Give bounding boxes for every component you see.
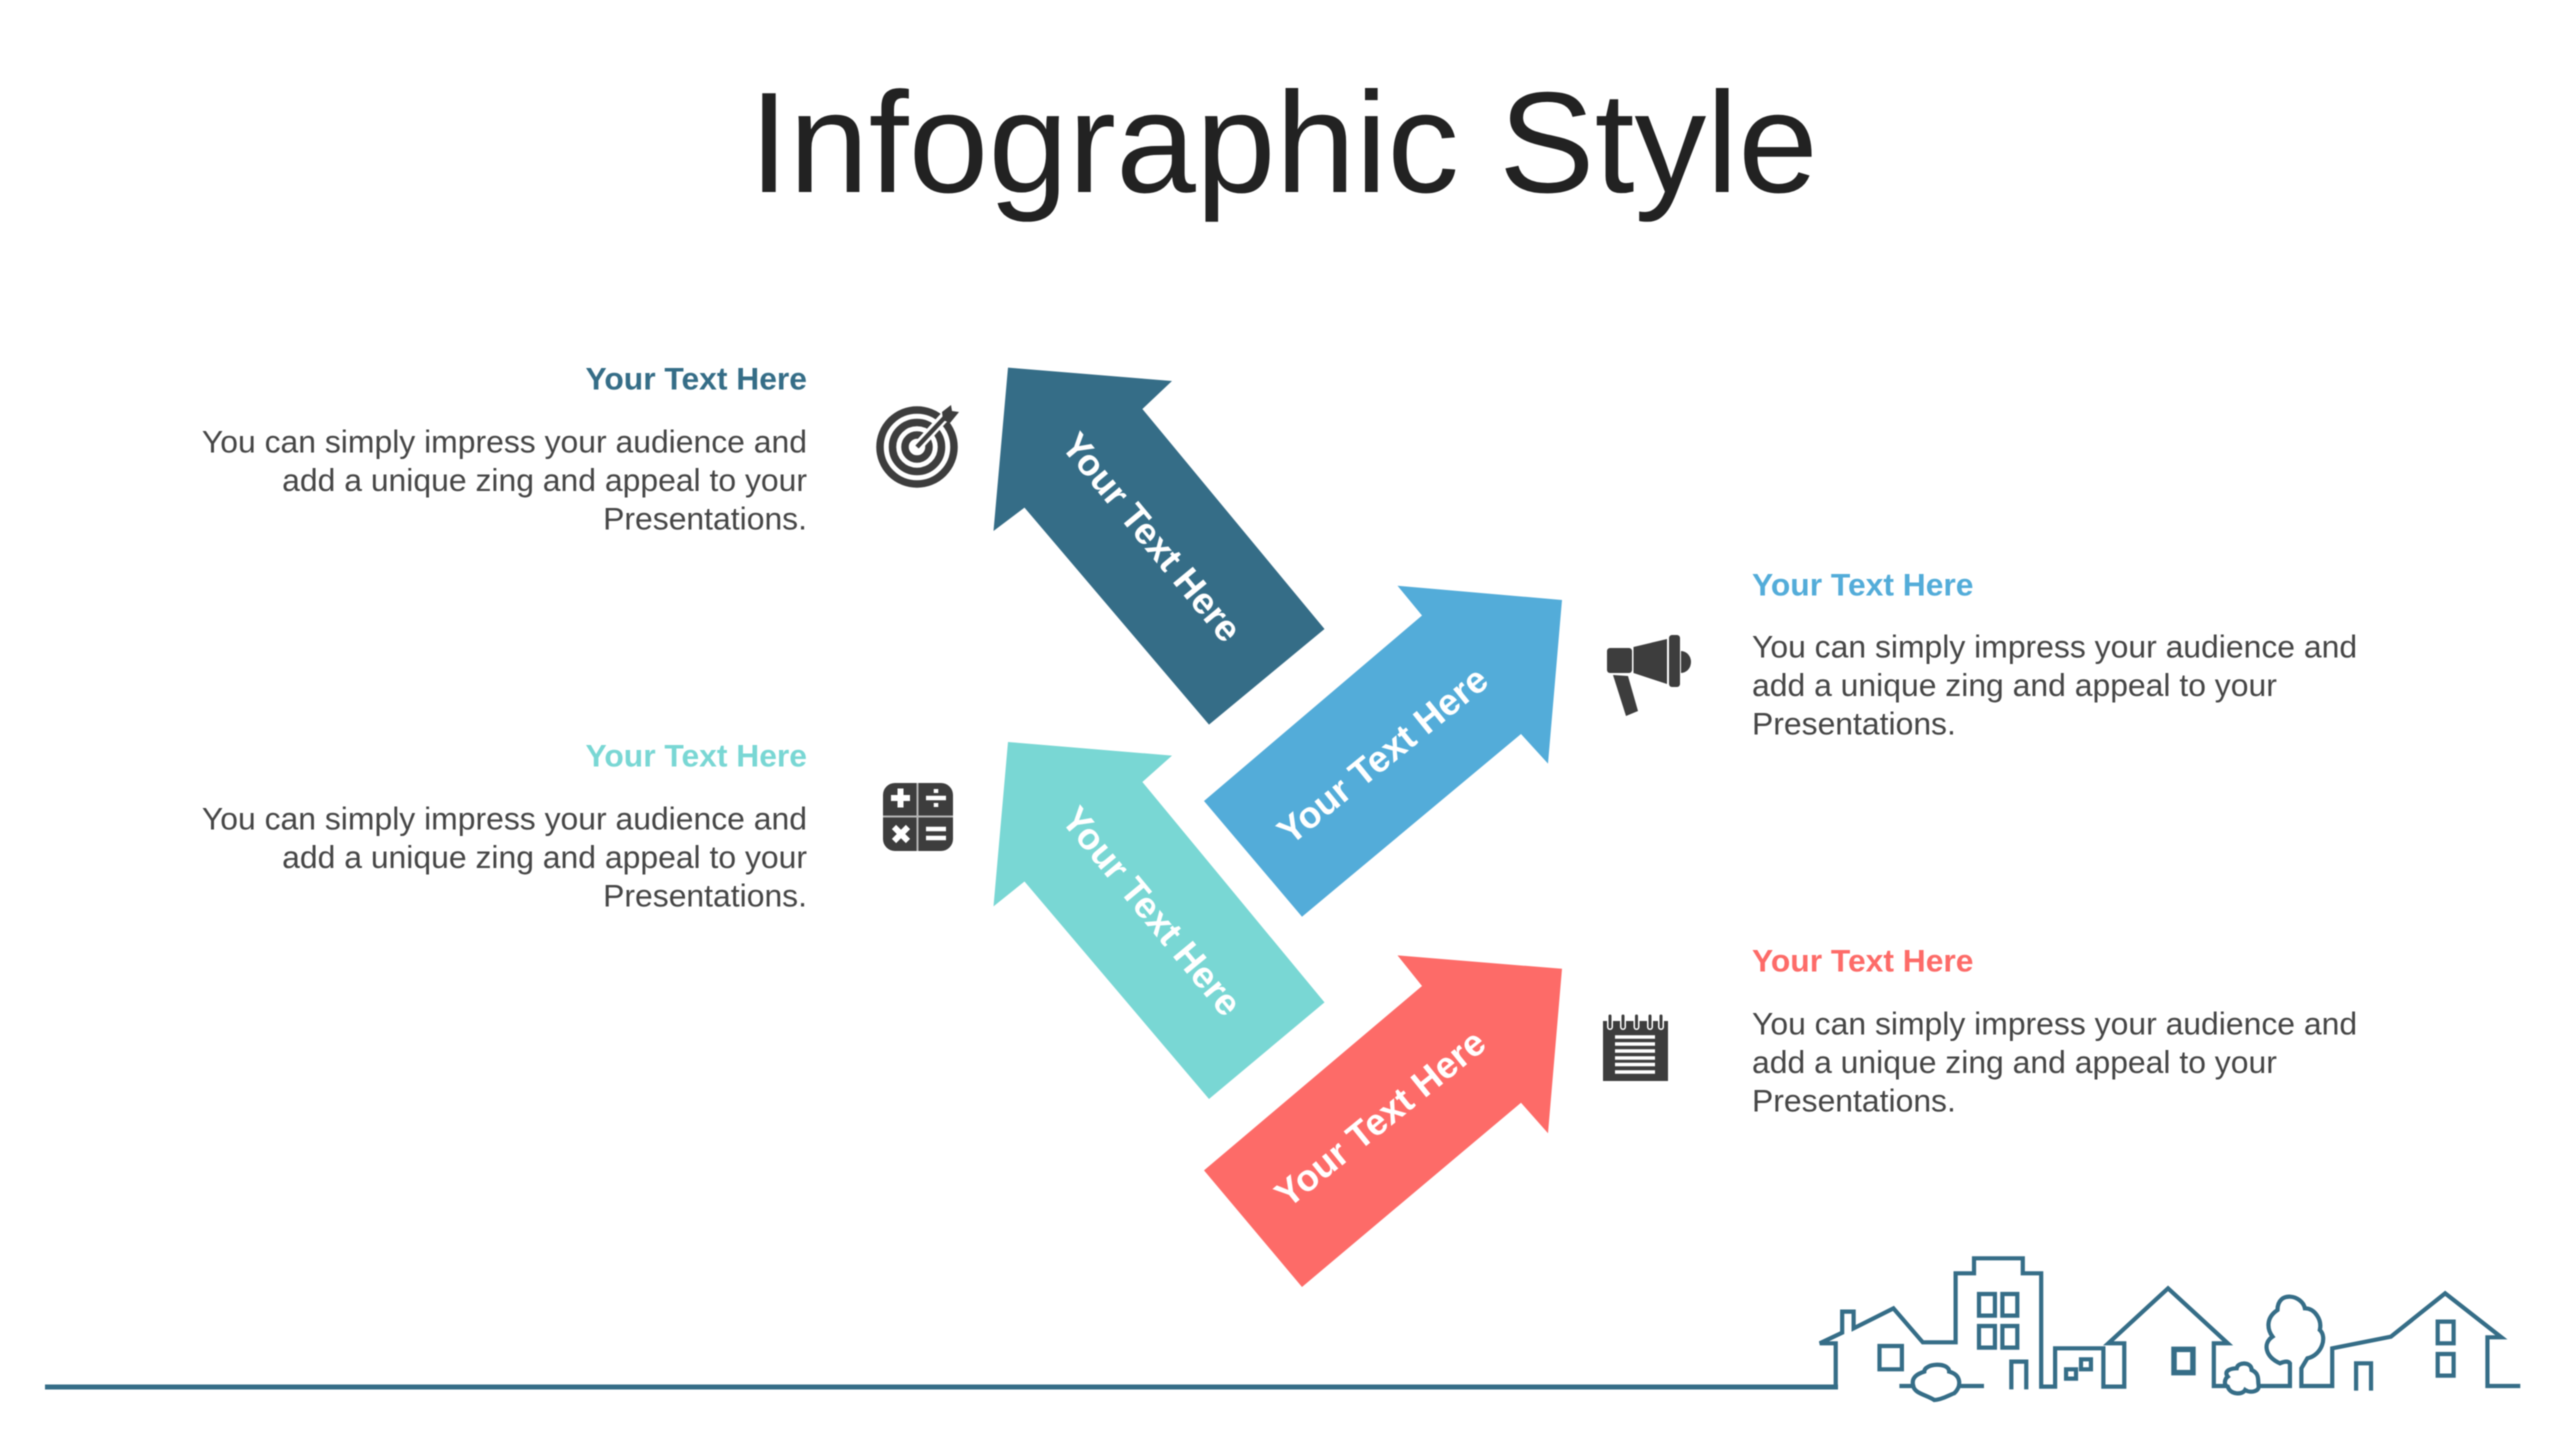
icon: target xyxy=(880,405,959,484)
arrow: coral: Your Text Here xyxy=(1267,1021,1493,1215)
text block: top left: You can simply impress your audience and xyxy=(202,424,807,460)
text block: middle left: Your Text Here xyxy=(586,738,807,774)
title: Infographic Style xyxy=(749,63,1818,223)
icon: calculator xyxy=(883,783,953,851)
text block: middle left: You can simply impress your audience and xyxy=(202,800,807,836)
text block: lower right: Your Text Here xyxy=(1752,942,1973,978)
text block: upper right xyxy=(1752,566,2357,742)
text block: middle left: add a unique zing and appeal to your xyxy=(282,839,807,875)
arrow: sky blue: Your Text Here xyxy=(1270,658,1496,852)
text block: lower right: Presentations. xyxy=(1752,1082,1956,1118)
arrow: dark blue: Your Text Here xyxy=(1054,425,1250,650)
text block: top left: Your Text Here xyxy=(586,360,807,396)
text block: lower right: add a unique zing and appeal to your xyxy=(1752,1044,2277,1080)
icon: megaphone xyxy=(1607,635,1691,716)
text block: upper right: Presentations. xyxy=(1752,706,1956,742)
text block: top left: add a unique zing and appeal to your xyxy=(282,462,807,498)
arrow: dark blue xyxy=(994,368,1324,725)
arrow: sky blue xyxy=(1204,586,1562,917)
text block: top left: Presentations. xyxy=(603,500,807,536)
icon: notepad xyxy=(1603,1016,1668,1081)
text block: lower right xyxy=(1752,942,2357,1118)
text block: upper right: Your Text Here xyxy=(1752,566,1973,602)
arrow: teal: Your Text Here xyxy=(1054,799,1250,1024)
arrow: coral xyxy=(1204,955,1562,1287)
text block: middle left xyxy=(202,738,807,914)
arrow: teal xyxy=(994,742,1324,1099)
text block: upper right: You can simply impress your audience and xyxy=(1752,628,2357,664)
text block: upper right: add a unique zing and appeal to your xyxy=(1752,667,2277,703)
illustration: town skyline xyxy=(1810,1258,2520,1400)
text block: middle left: Presentations. xyxy=(603,878,807,914)
text block: lower right: You can simply impress your audience and xyxy=(1752,1006,2357,1042)
ground line xyxy=(45,1384,1838,1390)
text block: top left xyxy=(202,360,807,536)
